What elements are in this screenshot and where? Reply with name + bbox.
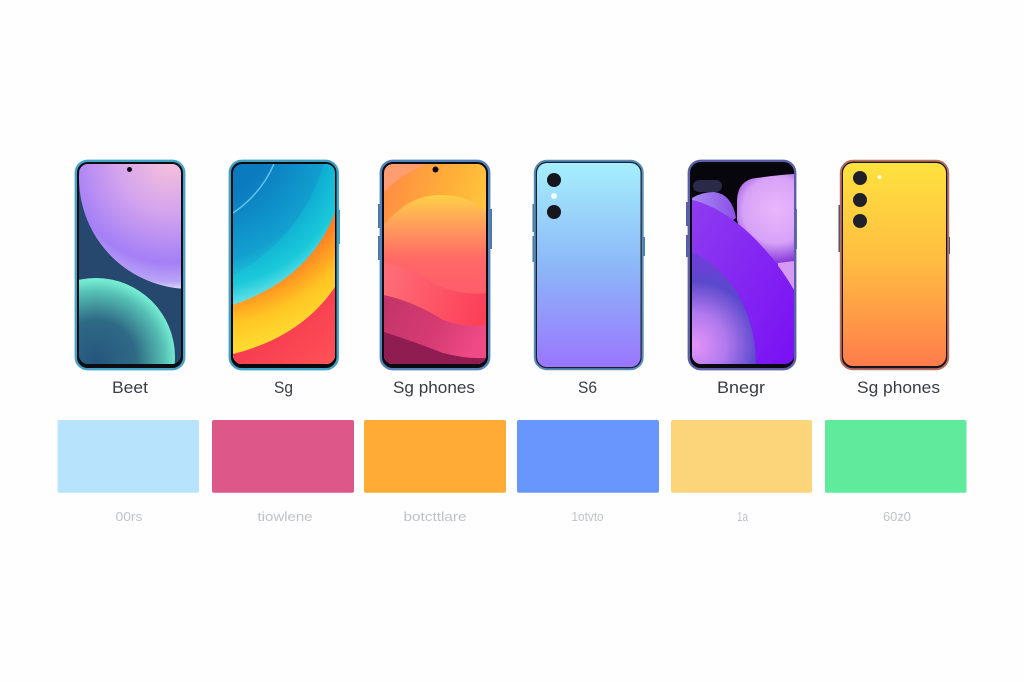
phone name: Sg: Sg (274, 378, 293, 397)
swatch caption 2: tiowlene (258, 509, 312, 524)
swatch: blue (517, 420, 659, 493)
swatch: yellow (671, 420, 812, 493)
phone name: Sg phones: Sg phones (857, 378, 940, 397)
infographic canvas (58, 160, 966, 521)
icon: lower camera (547, 205, 561, 219)
icon: camera three (853, 214, 867, 228)
icon: upper camera (547, 173, 561, 187)
phone 5: violet abstract wallpaper (686, 160, 798, 370)
phone 4: blue to violet back with two cameras (532, 161, 645, 369)
icon: flash (878, 175, 882, 179)
icon: camera one (853, 171, 867, 185)
phone name: Bnegr: Bnegr (717, 378, 765, 397)
phone 3: sunset wallpaper (378, 160, 492, 370)
swatch: green (825, 420, 966, 493)
swatch caption 3: botcttlare (404, 509, 466, 524)
phone 1: purple and teal wallpaper (74, 160, 186, 370)
swatch caption 6: 60z0 (883, 509, 911, 524)
phone name: Beet: Beet (112, 378, 148, 397)
swatch caption 4: 1otvto (572, 509, 604, 524)
icon: camera two (853, 193, 867, 207)
swatch: pink (212, 420, 354, 493)
swatch caption 1: 00rs (116, 509, 143, 524)
phone 6: yellow to orange back with three cameras (838, 161, 950, 369)
icon: flash (551, 193, 557, 199)
phone name: S6: S6 (578, 378, 597, 397)
swatch: orange (364, 420, 506, 493)
phone name: Sg phones: Sg phones (393, 378, 475, 397)
swatch: light blue (58, 420, 199, 493)
swatch caption 5: 1a (737, 509, 749, 524)
phone 2: blue, yellow and red wallpaper (229, 160, 340, 370)
